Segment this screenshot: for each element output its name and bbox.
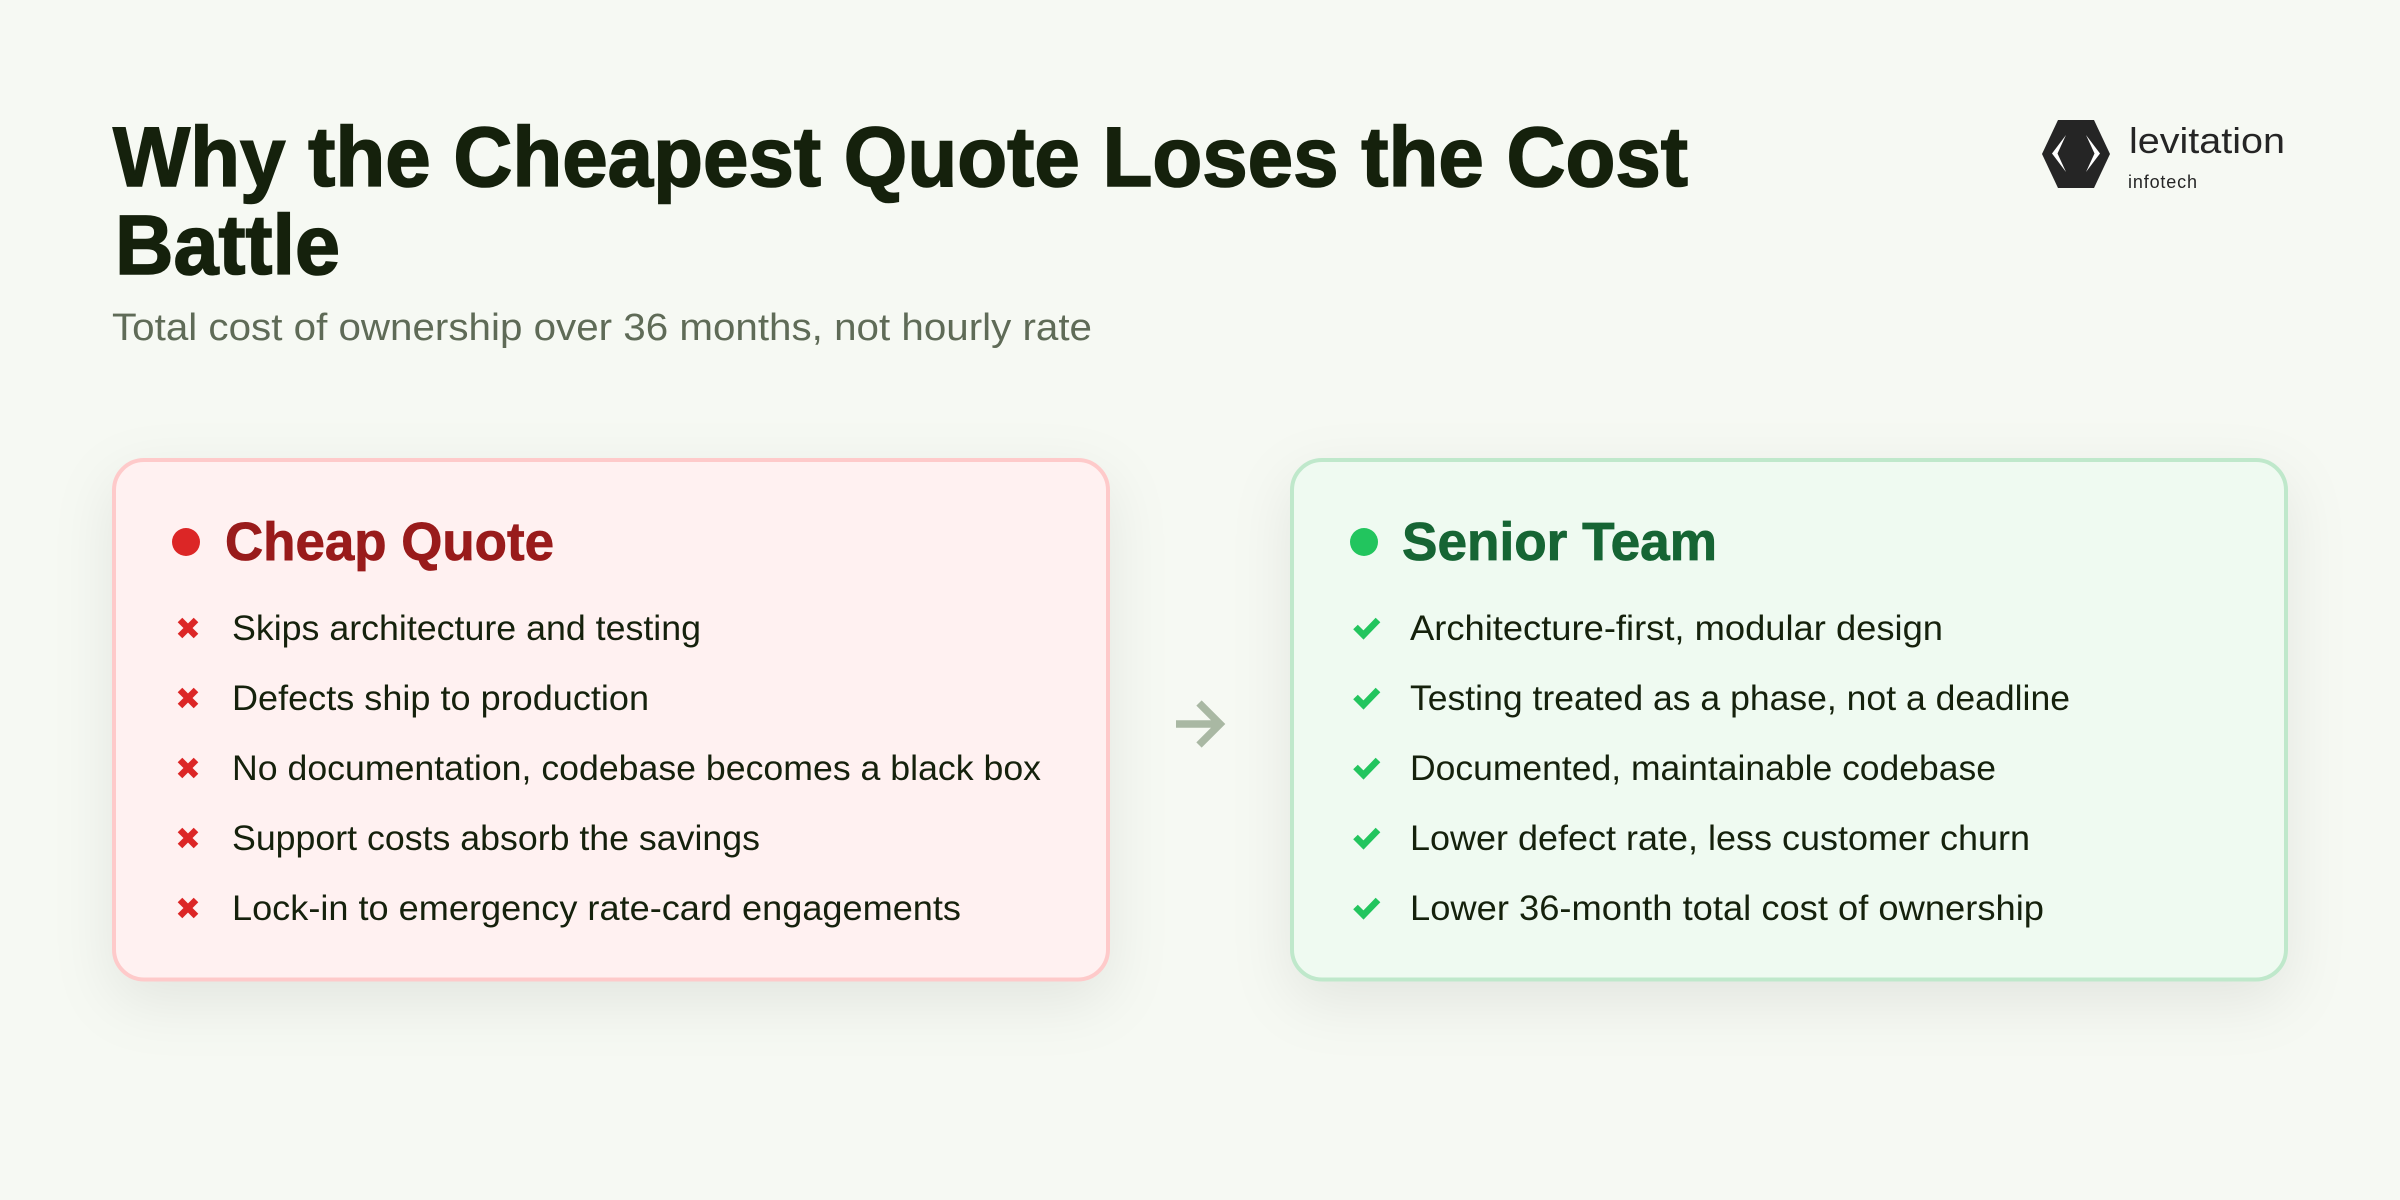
item: no documentation: No documentation, codebase becomes a black box — [232, 749, 1042, 788]
item: testing treated: Testing treated as a phase, not a deadline — [1410, 679, 2070, 718]
item: lower defect rate: Lower defect rate, less customer churn — [1410, 819, 2030, 858]
item: lock-in: Lock-in to emergency rate-card engagements — [232, 889, 961, 928]
heading: senior team: Senior Team — [1402, 512, 1717, 572]
logo: levitation infotech — [2042, 120, 2285, 192]
title: Why the Cheapest Quote Loses the Cost — [113, 110, 1688, 204]
icon: red status dot — [172, 528, 200, 556]
icon: hexagon logo mark — [2042, 120, 2110, 188]
arrow — [1176, 703, 1221, 745]
subtitle: Total cost of ownership over 36 months, not hourly rate — [112, 307, 1092, 349]
item: skips architecture: Skips architecture and testing — [232, 609, 701, 648]
item: lower tco: Lower 36-month total cost of ownership — [1410, 889, 2044, 928]
item: support costs: Support costs absorb the savings — [232, 819, 760, 858]
item: architecture-first: Architecture-first, modular design — [1410, 609, 1943, 648]
icon: green status dot — [1350, 528, 1378, 556]
title: Battle — [115, 198, 340, 292]
logo subtext: infotech — [2128, 172, 2197, 192]
logo wordmark: levitation — [2129, 120, 2285, 161]
item: documented: Documented, maintainable codebase — [1410, 749, 1996, 788]
title — [113, 110, 1688, 292]
heading: cheap quote: Cheap Quote — [225, 512, 554, 572]
item: defects ship: Defects ship to production — [232, 679, 649, 718]
panel: cheap quote — [114, 460, 1108, 980]
panel: senior team — [1292, 460, 2286, 980]
